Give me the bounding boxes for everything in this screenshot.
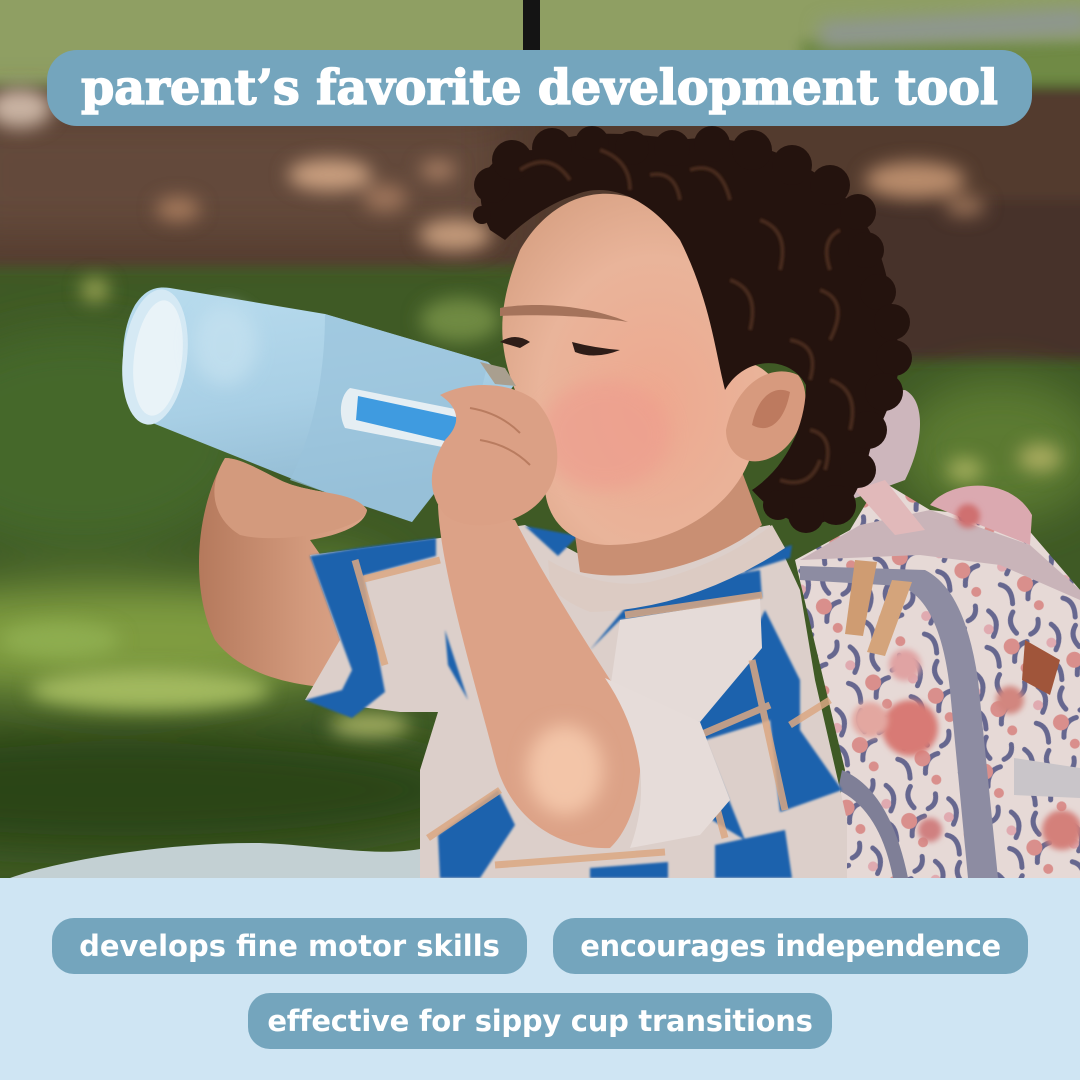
benefit: independence: encourages independence	[580, 929, 1001, 963]
benefit: sippy cup transitions	[248, 993, 832, 1049]
blanket	[10, 843, 425, 878]
shirt collar	[548, 525, 785, 612]
hair	[473, 126, 912, 533]
benefit: fine motor skills: develops fine motor skills	[79, 929, 500, 963]
benefit: independence	[553, 918, 1028, 974]
child: head	[473, 126, 912, 612]
panel: benefits	[0, 878, 1080, 1080]
eye and brow	[500, 305, 628, 322]
child: right arm and hand	[214, 385, 730, 848]
title banner	[47, 50, 1032, 126]
bottle	[115, 286, 516, 522]
title banner: parent’s favorite development tool	[81, 60, 998, 116]
shirt	[305, 525, 847, 878]
backpack	[795, 390, 1080, 878]
ear	[726, 371, 805, 461]
bottle handle	[341, 388, 470, 452]
sleeve	[605, 678, 730, 848]
benefit: sippy cup transitions: effective for sippy cup transitions	[267, 1004, 813, 1038]
pole	[523, 0, 540, 50]
child: left arm	[199, 458, 380, 688]
benefit: fine motor skills	[52, 918, 527, 974]
